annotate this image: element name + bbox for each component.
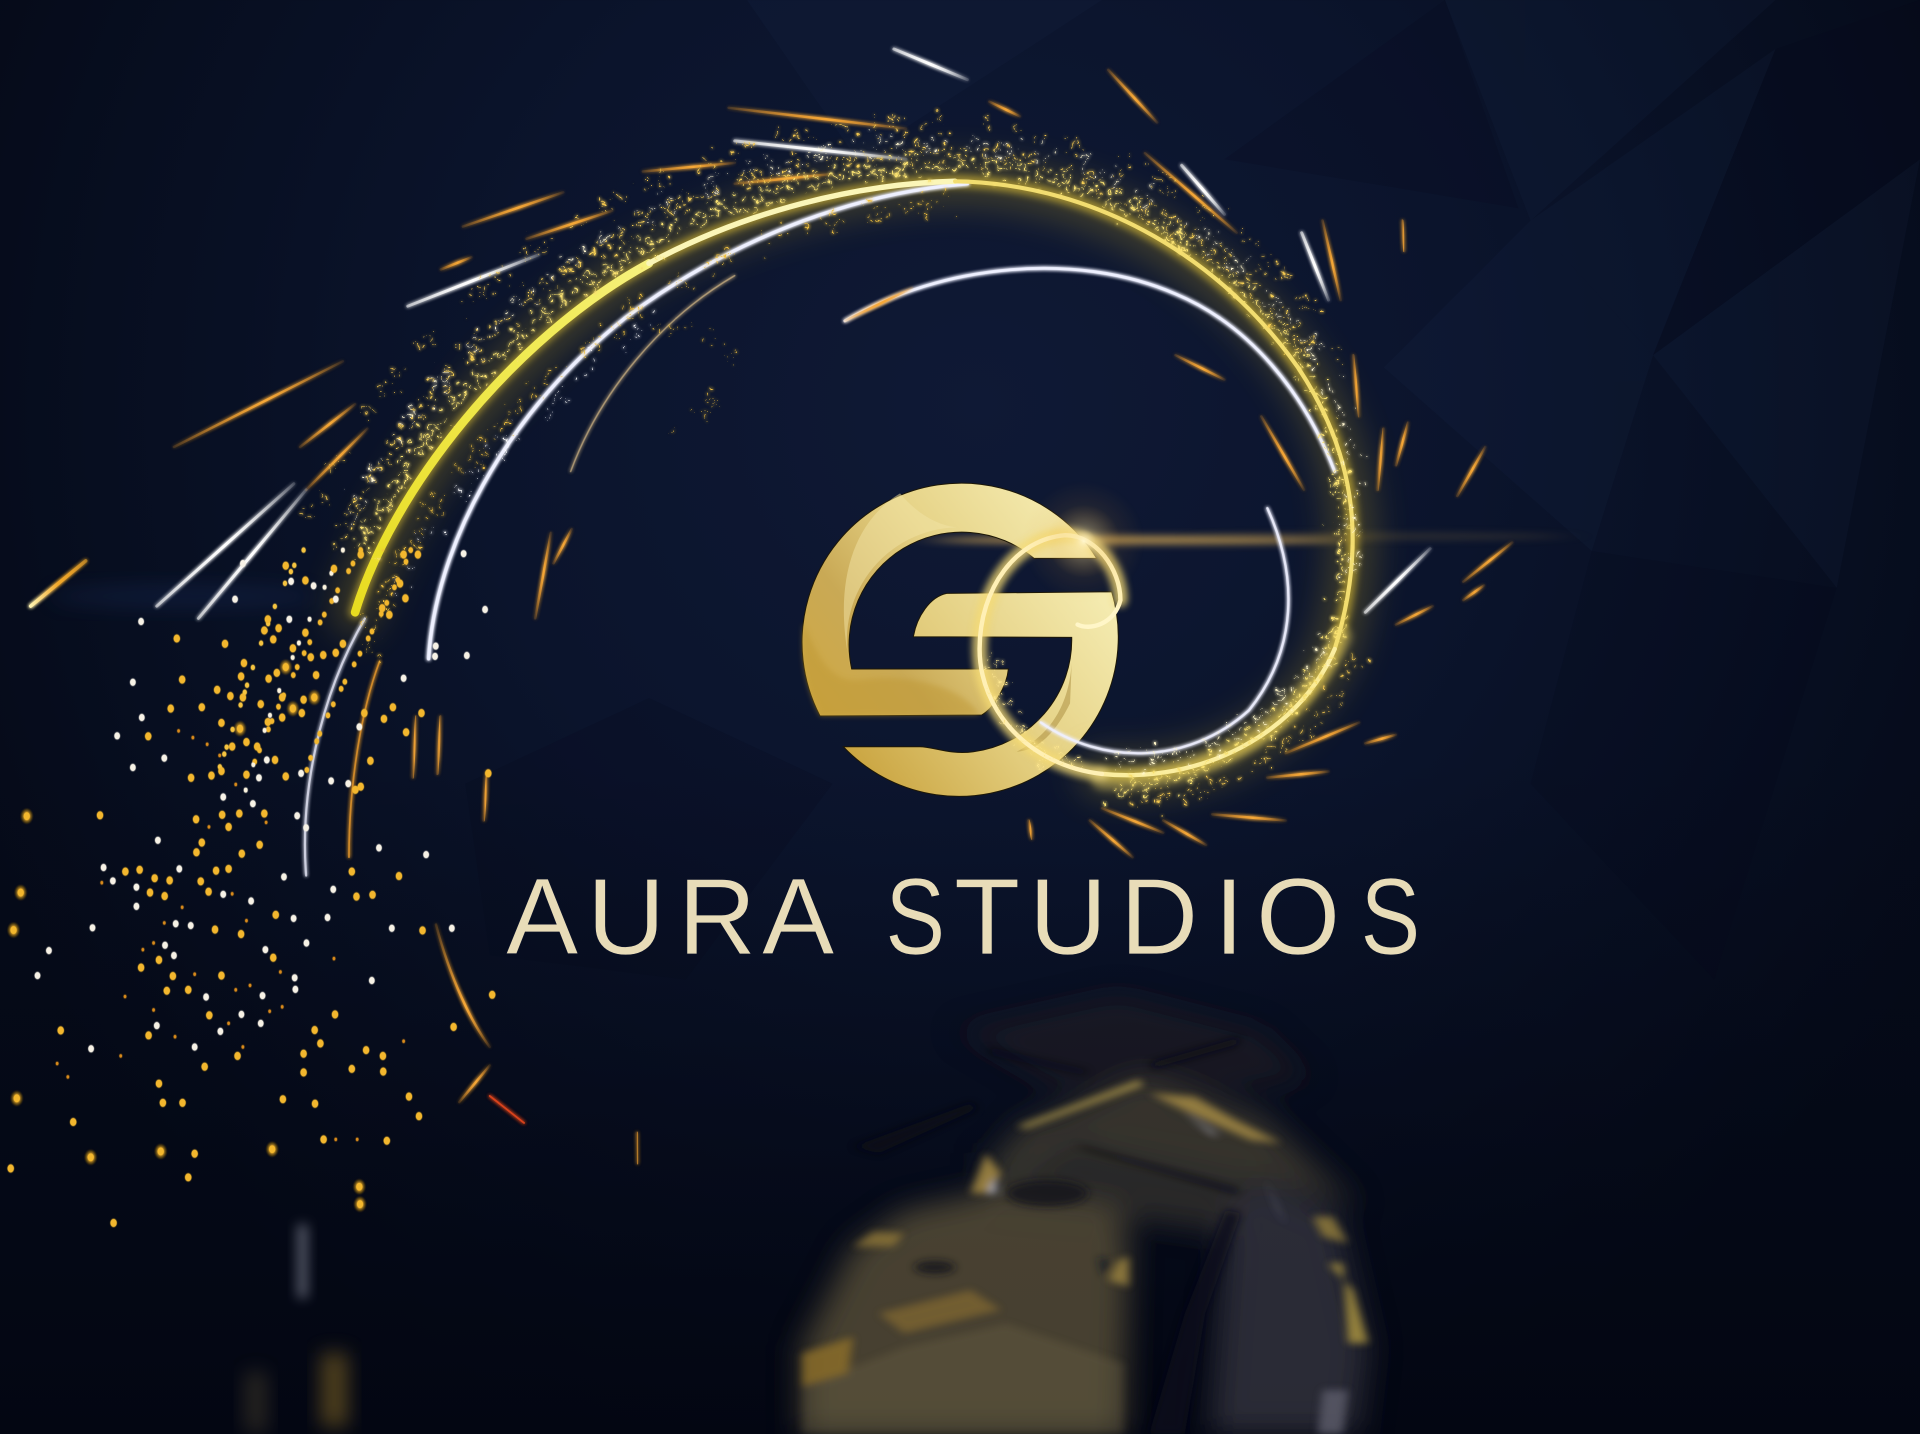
particles: dense glitter along the arc (312, 124, 1354, 802)
floor reflection (802, 993, 1368, 1434)
spiral: outer glow (355, 181, 1353, 779)
white trailing arcs (305, 184, 1335, 876)
sparks (31, 49, 1512, 1163)
wordmark: AURA STUDIOS: S (885, 856, 945, 977)
wordmark: AURA STUDIOS: S (1360, 856, 1420, 977)
logo flare star (1022, 480, 1145, 603)
wordmark: AURA STUDIOS (506, 856, 1420, 977)
floor reflection: left streak (245, 1225, 348, 1433)
particles: lower-left dust cloud (11, 550, 492, 1223)
spiral: gold core (355, 181, 1353, 775)
wordmark: AURA STUDIOS: AURA (506, 856, 835, 977)
wordmark: AURA STUDIOS: TUDIO (954, 856, 1340, 977)
horizontal lens flare (931, 533, 1567, 544)
logo mark (802, 483, 1118, 796)
